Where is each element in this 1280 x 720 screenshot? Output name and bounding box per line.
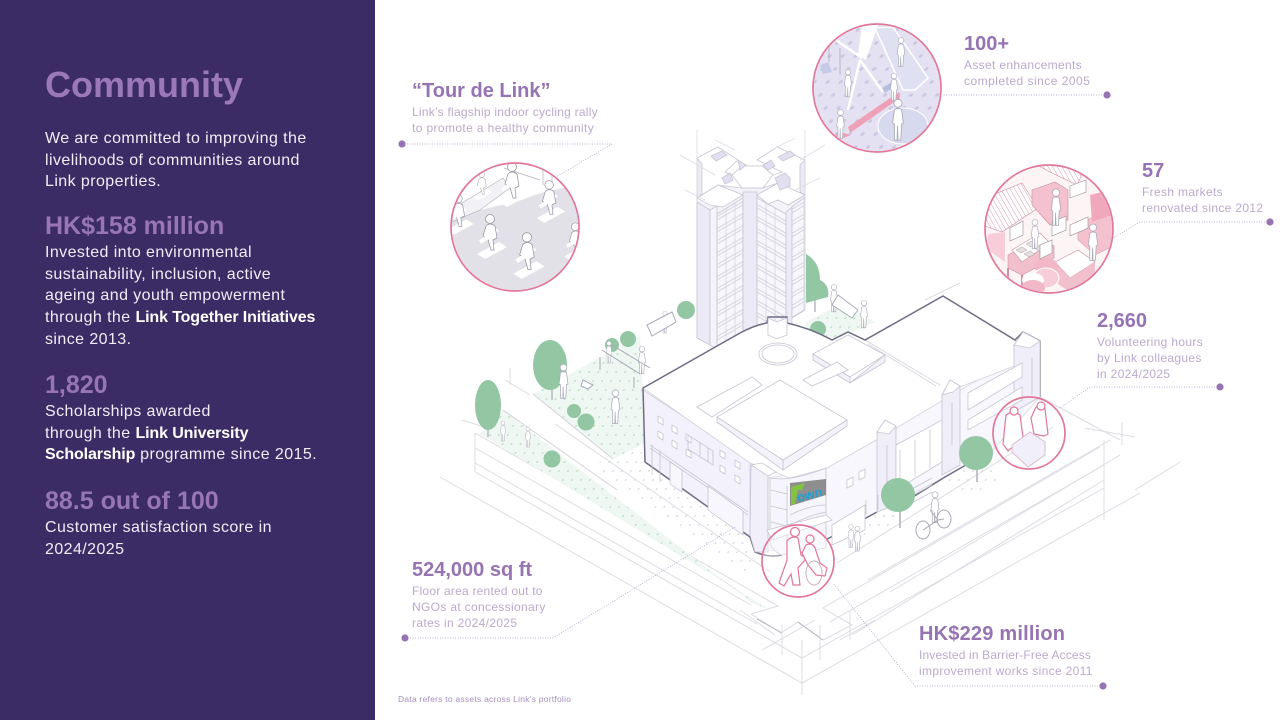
intro text: livelihoods of communities around	[45, 152, 300, 169]
callout: Tour de Link: to promote a healthy community	[412, 121, 594, 135]
intro text	[45, 130, 307, 190]
circle: barrier-free wheelchair	[762, 525, 834, 597]
callout: 57: 57	[1142, 160, 1164, 182]
circle: fresh market	[985, 165, 1115, 296]
building: roof	[643, 296, 1022, 478]
stat: HK$158 million: Invested into environmental	[45, 244, 252, 261]
lawn: green dotted strip and garden	[480, 303, 1000, 610]
stat: 1,820 scholarships: Scholarship programme since 2015.	[45, 446, 317, 463]
stat: satisfaction score: 2024/2025	[45, 541, 124, 558]
callout: Tour de Link: Link’s flagship indoor cycling rally	[412, 105, 598, 119]
stat: HK$158 million: since 2013.	[45, 331, 131, 348]
building: right wall	[760, 350, 1040, 552]
callout: 100+	[964, 33, 1090, 88]
stat: 1,820 scholarships: through the Link University	[45, 425, 248, 442]
callout: 100+: Asset enhancements	[964, 58, 1082, 72]
title: Community	[45, 64, 243, 105]
callout: 524,000 sq ft: 524,000 sq ft	[412, 559, 532, 581]
ground plinth lines	[440, 368, 1180, 695]
shop sign: Town logo	[790, 479, 826, 506]
left wall windows	[650, 416, 748, 535]
callout: 2,660: 2,660	[1097, 310, 1147, 332]
stat: 1,820 scholarships: Scholarships awarded	[45, 403, 211, 420]
callout: 2,660	[1097, 310, 1203, 381]
circle: volunteering colleagues	[993, 397, 1065, 469]
callout: 2,660: in 2024/2025	[1097, 367, 1170, 381]
stat: satisfaction score: 88.5 out of 100	[45, 487, 219, 515]
intro text: We are committed to improving the	[45, 130, 307, 147]
building: dark outline	[643, 296, 1040, 556]
roof slabs and skylight	[697, 318, 885, 470]
stat: HK$158 million: sustainability, inclusion, active	[45, 266, 271, 283]
building: left wall	[643, 390, 750, 537]
callout: 57: Fresh markets	[1142, 185, 1223, 199]
callout: 524,000 sq ft	[412, 559, 546, 630]
illustration: isometric community shopping centre	[398, 23, 1274, 695]
residential tower	[680, 130, 825, 349]
stat: satisfaction score: Customer satisfaction score in	[45, 519, 272, 536]
trees and garden people behind the building	[475, 254, 868, 468]
stat: HK$158 million: ageing and youth empowerment	[45, 287, 285, 304]
callout: Tour de Link	[412, 80, 598, 135]
shop sign: Town logo: own	[795, 484, 824, 505]
stat: satisfaction score	[45, 487, 272, 558]
left panel	[0, 0, 375, 720]
callout: 57: renovated since 2012	[1142, 201, 1263, 215]
callout: 2,660: Volunteering hours	[1097, 335, 1203, 349]
callout: HK$229 million: improvement works since 2011	[919, 664, 1093, 678]
stat: HK$158 million: HK$158 million	[45, 212, 224, 240]
callout: 100+: completed since 2005	[964, 74, 1090, 88]
intro text: Link properties.	[45, 173, 161, 190]
roof back ridge	[865, 283, 960, 386]
callout: 524,000 sq ft: rates in 2024/2025	[412, 616, 517, 630]
circle: Tour de Link cycling rally	[450, 162, 580, 292]
circle: playground asset enhancements	[813, 24, 941, 152]
callout: 57	[1142, 160, 1263, 215]
callout: HK$229 million: Invested in Barrier-Free Access	[919, 648, 1091, 662]
callout: 100+: 100+	[964, 33, 1009, 55]
stat: HK$158 million	[45, 212, 315, 348]
leader lines with dots	[402, 95, 1270, 686]
trees and people in front of building	[848, 436, 993, 551]
callout: HK$229 million: HK$229 million	[919, 623, 1065, 645]
callout: 524,000 sq ft: Floor area rented out to	[412, 584, 543, 598]
entrance corner tower	[750, 463, 832, 555]
callout: 2,660: by Link colleagues	[1097, 351, 1202, 365]
callout: Tour de Link: “Tour de Link”	[412, 80, 551, 102]
callout: 524,000 sq ft: NGOs at concessionary	[412, 600, 546, 614]
pillars and facade details	[832, 332, 1040, 545]
stat: 1,820 scholarships: 1,820	[45, 371, 108, 399]
stat: 1,820 scholarships	[45, 371, 317, 463]
callout: HK$229 million	[919, 623, 1093, 678]
footnote: Data refers to assets across Link’s portfolio	[398, 694, 571, 704]
shopping centre building	[643, 283, 1040, 556]
stat: HK$158 million: through the Link Together Initiatives	[45, 309, 315, 326]
